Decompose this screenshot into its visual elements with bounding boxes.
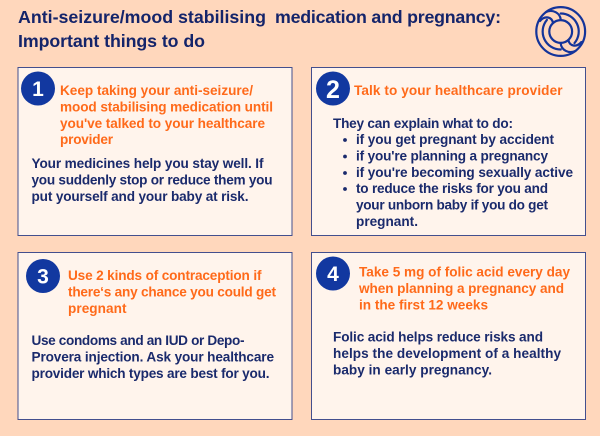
panel 3 body text bbox=[32, 333, 274, 381]
panel 1 body text: put yourself and your baby at risk. bbox=[32, 189, 248, 204]
panel 3: use 2 kinds of contraception bbox=[18, 252, 292, 420]
icon: number 3 badge: 3 bbox=[37, 266, 49, 288]
panel 2 bullet list: your unborn baby if you do get bbox=[356, 198, 548, 212]
panel 3 heading: pregnant bbox=[68, 301, 127, 316]
panel 4 body text: baby in early pregnancy. bbox=[333, 362, 492, 378]
title: Important things to do bbox=[18, 31, 205, 51]
panel 2 bullet list: to reduce the risks for you and bbox=[356, 181, 548, 196]
icon: number 2 badge: 2 bbox=[326, 76, 340, 104]
panel 4 body text: Folic acid helps reduce risks and bbox=[333, 330, 543, 344]
panel 1 heading bbox=[60, 83, 273, 147]
panel 4 heading: Take 5 mg of folic acid every day bbox=[359, 264, 570, 280]
panel 3 body text: Use condoms and an IUD or Depo- bbox=[32, 333, 244, 348]
panel 2 bullet list: if you're planning a pregnancy bbox=[356, 148, 548, 164]
panel 2 bullet list bbox=[343, 132, 573, 229]
panel 3 heading: there‘s any chance you could get bbox=[68, 284, 276, 300]
icon: number 2 badge bbox=[316, 72, 350, 106]
panel 2 bullet list: if you're becoming sexually active bbox=[356, 165, 573, 180]
panel 4 heading: in the first 12 weeks bbox=[359, 298, 488, 312]
panel 2 bullet list: pregnant. bbox=[356, 214, 418, 229]
panel 2 bullet list: if you get pregnant by accident bbox=[356, 132, 554, 147]
panel 1 heading: mood stabilising medication until bbox=[60, 100, 273, 114]
panel 1 heading: you've talked to your healthcare bbox=[60, 116, 265, 131]
panel 1: keep taking medication bbox=[18, 68, 292, 236]
panel 4 heading bbox=[358, 264, 570, 312]
panel 2: talk to your healthcare provider bbox=[312, 68, 586, 236]
icon: number 4 badge bbox=[316, 256, 350, 290]
panel 2 intro text: They can explain what to do: bbox=[333, 116, 513, 131]
panel 1 body text: Your medicines help you stay well. If bbox=[32, 156, 264, 171]
title: medication and pregnancy: bbox=[275, 7, 501, 27]
icon: number 1 badge: 1 bbox=[32, 78, 44, 101]
icon: number 1 badge bbox=[21, 72, 55, 106]
panel 1 body text bbox=[32, 156, 272, 204]
panel 3 body text: Provera injection. Ask your healthcare bbox=[32, 350, 274, 364]
panel 4: take folic acid bbox=[312, 252, 586, 420]
icon: circular logo bbox=[536, 7, 585, 56]
panel 4 body text bbox=[333, 330, 561, 378]
title: Anti-seizure/mood stabilising bbox=[18, 7, 266, 27]
panel 3 body text: provider which types are best for you. bbox=[32, 366, 270, 381]
icon: number 3 badge bbox=[26, 259, 60, 293]
title bbox=[18, 7, 501, 51]
panel 1 heading: provider bbox=[60, 132, 114, 147]
panel 1 body text: you suddenly stop or reduce them you bbox=[32, 172, 272, 188]
panel 3 heading bbox=[68, 268, 276, 316]
panel 4 body text: helps the development of a healthy bbox=[333, 346, 561, 361]
icon: number 4 badge: 4 bbox=[327, 263, 339, 286]
panel 4 heading: when planning a pregnancy and bbox=[358, 281, 564, 296]
panel 3 heading: Use 2 kinds of contraception if bbox=[68, 268, 262, 283]
panel 1 heading: Keep taking your anti-seizure/ bbox=[60, 83, 253, 98]
panel 2 heading: Talk to your healthcare provider bbox=[354, 83, 563, 98]
